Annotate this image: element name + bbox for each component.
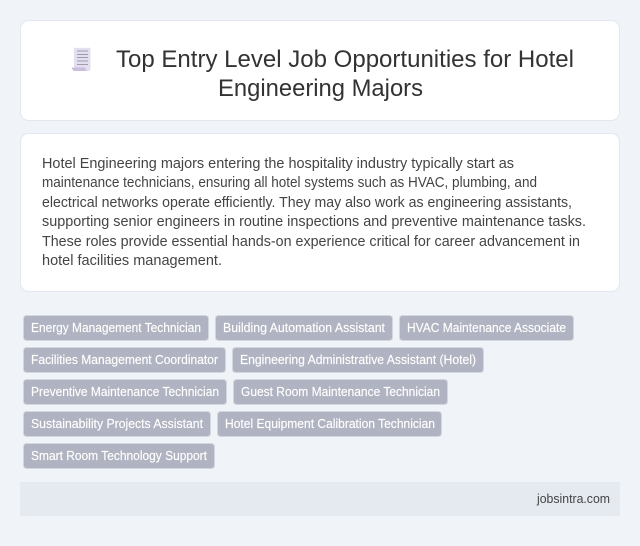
tag: Sustainability Projects Assistant	[31, 417, 204, 431]
tag list	[24, 316, 574, 468]
footer	[20, 482, 620, 516]
panel: header	[20, 20, 620, 120]
tag: Smart Room Technology Support	[31, 449, 207, 463]
text block: intro paragraph: maintenance technicians, ensuring all hotel systems such as HVAC, plumbing, and	[42, 175, 537, 191]
title	[116, 46, 574, 102]
title: Engineering Majors	[218, 75, 423, 102]
tag: Guest Room Maintenance Technician	[241, 385, 440, 399]
text block: intro paragraph	[42, 156, 586, 269]
footer: jobsintra.com	[536, 492, 610, 506]
tag	[24, 380, 226, 404]
title: Top Entry Level Job Opportunities for Hotel	[116, 46, 574, 73]
panel: intro text	[20, 134, 620, 292]
text block: intro paragraph: Hotel Engineering majors entering the hospitality industry typically start as	[42, 156, 514, 172]
tag	[400, 316, 574, 340]
tag	[216, 316, 392, 340]
tag	[24, 316, 208, 340]
tag	[24, 444, 214, 468]
tag	[24, 412, 210, 436]
tag: Energy Management Technician	[31, 321, 201, 335]
tag: Engineering Administrative Assistant (Hotel)	[240, 353, 476, 367]
tag: Preventive Maintenance Technician	[31, 385, 219, 399]
icon: document scroll	[72, 48, 90, 71]
text block: intro paragraph: hotel facilities management.	[42, 253, 222, 269]
tag: Hotel Equipment Calibration Technician	[225, 417, 435, 431]
text block: intro paragraph: These roles provide essential hands-on experience critical for career advancement in	[42, 234, 580, 250]
text block: intro paragraph: supporting senior engineers in routine inspections and preventive maintenance tasks.	[42, 214, 586, 230]
tag: HVAC Maintenance Associate	[407, 321, 566, 335]
tag	[232, 348, 484, 372]
tag: Building Automation Assistant	[223, 321, 386, 335]
tag	[234, 380, 448, 404]
tag: Facilities Management Coordinator	[31, 353, 218, 367]
tag	[24, 348, 226, 372]
text block: intro paragraph: electrical networks operate efficiently. They may also work as engineering assistants,	[42, 195, 572, 211]
tag	[218, 412, 442, 436]
